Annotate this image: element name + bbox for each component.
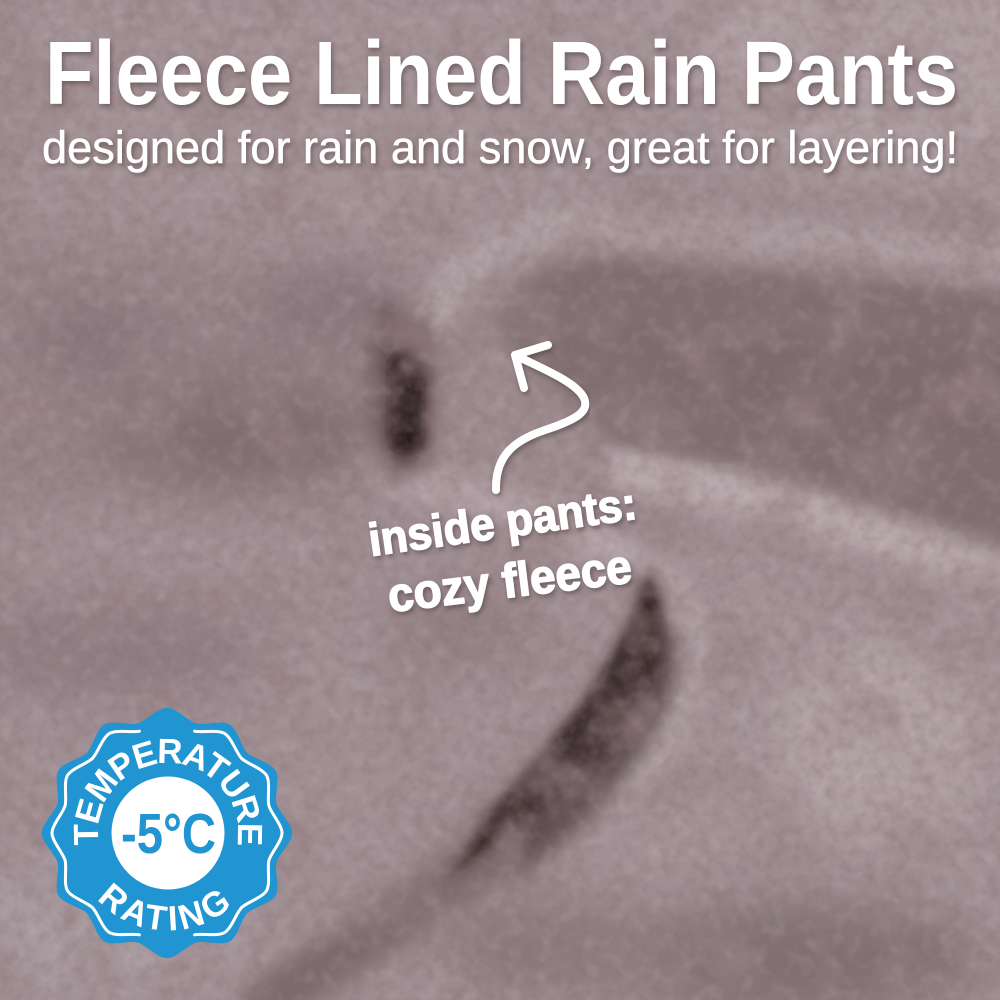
curl interior fold (500, 257, 1000, 555)
subtitle: designed for rain and snow, great for layering! (42, 122, 958, 173)
temperature value: -5°C (121, 802, 216, 866)
deep fold crease (450, 575, 664, 875)
scalloped badge shape (42, 708, 292, 958)
center disc (112, 776, 224, 890)
arrow pointing to fleece (496, 345, 585, 490)
callout: inside pants cozy fleece: inside pants: (365, 477, 640, 566)
callout: inside pants cozy fleece (365, 477, 640, 623)
curved label top: TEMPERATURE (74, 738, 262, 846)
badge: temperature rating (42, 708, 292, 958)
curved label bottom: RATING (98, 882, 229, 930)
callout: inside pants cozy fleece: cozy fleece (385, 540, 635, 623)
